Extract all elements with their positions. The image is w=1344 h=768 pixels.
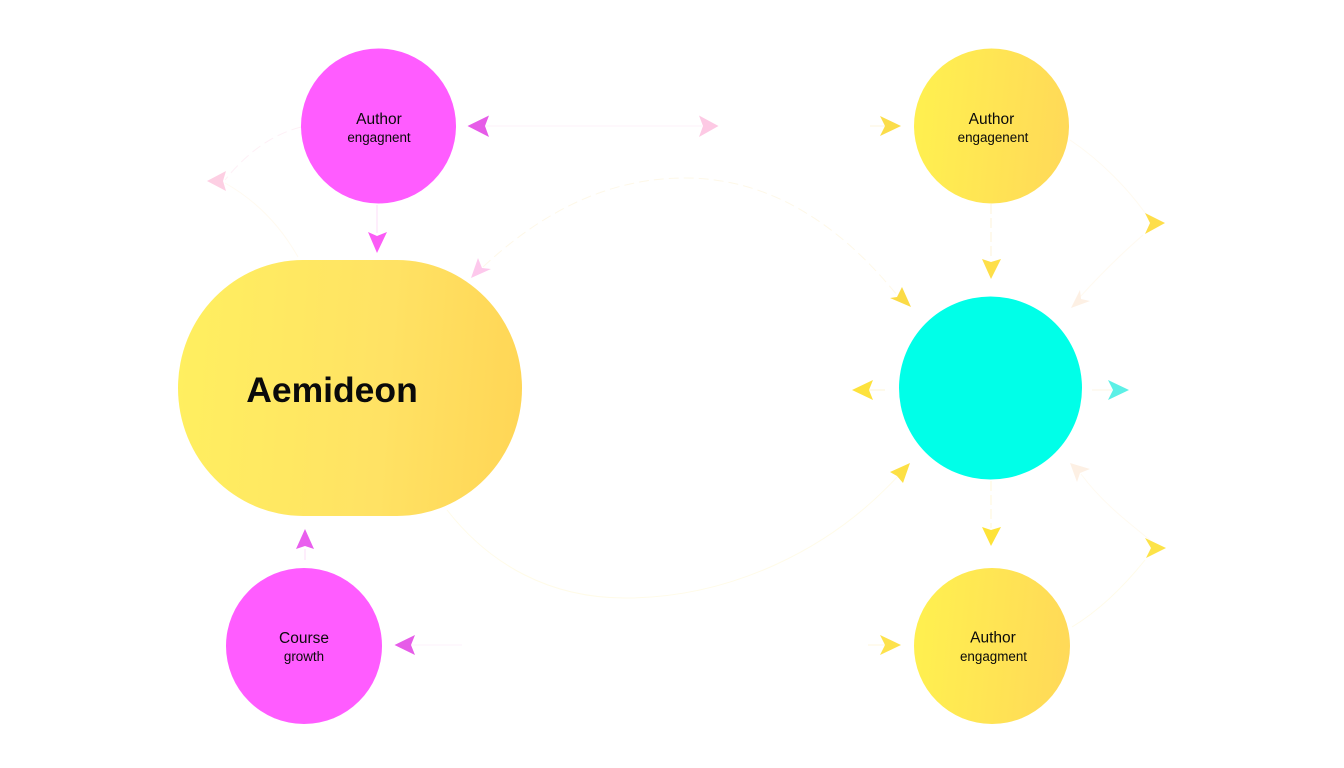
- main shape: Aemideon: Aemideon: [246, 370, 418, 410]
- main shape: Aemideon: [178, 260, 522, 516]
- connector: lower arc from main shape to cyan circle: [447, 463, 910, 598]
- node: yellow Author engagenent: engagenent: [958, 130, 1029, 145]
- arrow: into course growth circle: [394, 635, 462, 655]
- arrow: into top yellow circle: [870, 116, 901, 136]
- arrow: up from course growth to main shape: [296, 529, 314, 560]
- node: pink Course growth: Course: [279, 630, 329, 647]
- node: pink Author engagnent: engagnent: [347, 130, 411, 145]
- connector: pink top circle to light pink arrow: [468, 116, 718, 137]
- arrow: cyan circle down to bottom yellow circle: [982, 481, 1001, 546]
- connector: top yellow circle to right arrow and back to cyan circle: [1070, 140, 1165, 308]
- node: yellow Author engagment: Author: [970, 630, 1016, 646]
- node: pink Course growth: growth: [284, 649, 324, 664]
- arrow: top yellow circle down to cyan circle: [982, 204, 1001, 279]
- node: pink Course growth: [226, 568, 382, 724]
- node: pink Author engagnent: Author: [356, 111, 402, 128]
- arrow: cyan circle left output: [852, 380, 885, 400]
- connector: bottom yellow circle to right arrow and back to cyan circle: [1070, 463, 1166, 627]
- node: yellow Author engagenent: Author: [969, 111, 1014, 128]
- arrow: pink top circle down to main shape: [368, 205, 387, 253]
- node: yellow Author engagment: [914, 568, 1070, 724]
- arrow: into bottom yellow circle: [868, 635, 901, 655]
- arrow: cyan circle right output: [1092, 380, 1129, 400]
- node: pink Author engagnent: [301, 48, 456, 204]
- node: yellow Author engagenent: [914, 48, 1069, 204]
- node: cyan circle: [899, 296, 1082, 480]
- connector: pink top circle curving left to main shape: [207, 127, 301, 257]
- node: yellow Author engagment: engagment: [960, 649, 1027, 664]
- connector: dashed arc between main shape and cyan circle: [471, 178, 911, 307]
